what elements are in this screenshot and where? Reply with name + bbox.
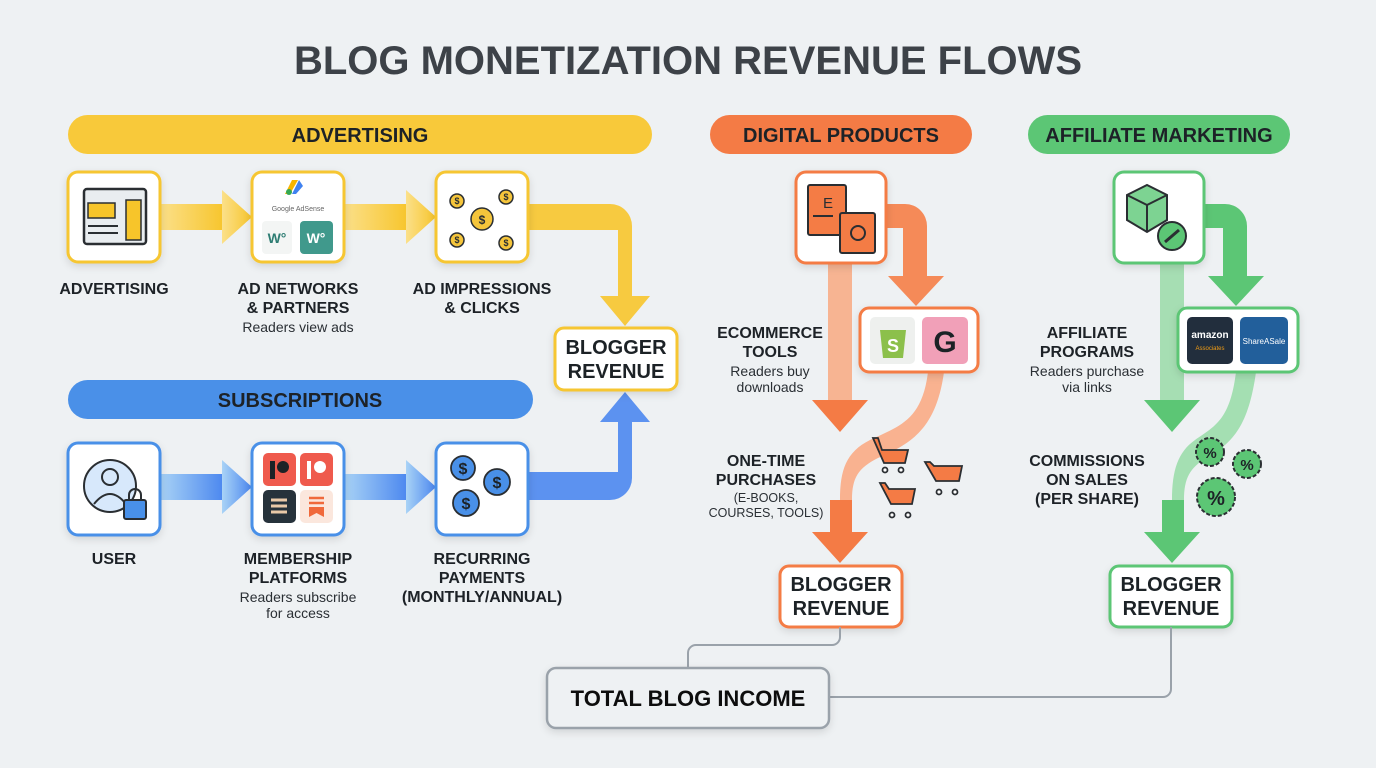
- label: ad networks: & PARTNERS: [247, 300, 350, 317]
- arrows: affiliate: [1144, 204, 1264, 563]
- label: ad impressions: & CLICKS: [444, 300, 520, 317]
- card: digital products: E: [823, 195, 833, 212]
- pill: digital products: [710, 115, 972, 154]
- icon: percent badges: %: [1207, 488, 1225, 510]
- card: advertising: [68, 172, 160, 262]
- box: blogger revenue (digital products): [780, 566, 902, 627]
- label: ad impressions: AD IMPRESSIONS: [413, 281, 552, 298]
- label: ad impressions: [413, 281, 552, 317]
- pill: subscriptions: [68, 380, 533, 419]
- pill: affiliate marketing: AFFILIATE MARKETING: [1045, 125, 1273, 147]
- card: recurring payments: $: [462, 496, 471, 513]
- card: ecommerce tools: S: [887, 336, 899, 356]
- card: ad networks: W°: [307, 230, 325, 246]
- label: ecommerce tools: TOOLS: [743, 344, 798, 361]
- label: commissions: ON SALES: [1046, 472, 1128, 489]
- label: membership platforms: [240, 551, 357, 621]
- card: affiliate programs: ShareASale: [1243, 337, 1286, 346]
- label: ad networks: [238, 281, 359, 335]
- label: affiliate programs: via links: [1062, 379, 1112, 395]
- card: ad impressions: $: [479, 213, 486, 227]
- label: recurring payments: PAYMENTS: [439, 570, 525, 587]
- label: recurring payments: RECURRING: [434, 551, 530, 568]
- connectors to total: [688, 627, 1171, 697]
- box: blogger revenue (digital products): REVENUE: [793, 598, 889, 620]
- label: one-time purchases: COURSES, TOOLS): [709, 506, 823, 520]
- card: digital products: [796, 172, 886, 263]
- box: total blog income: [547, 668, 829, 728]
- card: ecommerce tools: [860, 308, 978, 372]
- label: affiliate programs: Readers purchase: [1030, 363, 1144, 379]
- box: blogger revenue (affiliate): [1110, 566, 1232, 627]
- pill: affiliate marketing: [1028, 115, 1290, 154]
- label: commissions: (PER SHARE): [1035, 491, 1139, 508]
- label: affiliate programs: [1030, 325, 1144, 395]
- card: ecommerce tools: G: [933, 326, 957, 359]
- icon: percent badges: %: [1240, 457, 1254, 474]
- label: ecommerce tools: Readers buy: [730, 363, 810, 379]
- box: blogger revenue (affiliate): BLOGGER: [1120, 574, 1222, 596]
- card: affiliate programs: amazon: [1191, 330, 1229, 341]
- arrows: advertising flow: [160, 190, 650, 326]
- card: recurring payments: [436, 443, 528, 535]
- card: ad networks: [252, 172, 344, 262]
- label: ad networks: AD NETWORKS: [238, 281, 359, 298]
- icon: shopping carts: [873, 438, 962, 518]
- label: membership platforms: Readers subscribe: [240, 589, 357, 605]
- card: ad networks: W°: [268, 230, 286, 246]
- label: one-time purchases: PURCHASES: [716, 472, 817, 489]
- label: ecommerce tools: [717, 325, 823, 395]
- box: total blog income: TOTAL BLOG INCOME: [571, 686, 805, 711]
- label: user: USER: [92, 551, 137, 568]
- card: membership platforms: [252, 443, 344, 535]
- pill: advertising: [68, 115, 652, 154]
- label: advertising: ADVERTISING: [59, 281, 169, 298]
- box: blogger revenue (advertising/subscriptions): REVENUE: [568, 361, 664, 383]
- card: ad networks: Google AdSense: [272, 206, 324, 213]
- pill: subscriptions: SUBSCRIPTIONS: [218, 390, 382, 412]
- label: affiliate programs: AFFILIATE: [1047, 325, 1128, 342]
- card: recurring payments: $: [493, 475, 502, 492]
- box: blogger revenue (advertising/subscriptions): BLOGGER: [565, 337, 667, 359]
- label: commissions: COMMISSIONS: [1029, 453, 1145, 470]
- icon: percent badges: [1196, 438, 1261, 516]
- card: affiliate: [1114, 172, 1204, 263]
- card: ad impressions: $: [503, 238, 509, 248]
- icon: percent badges: %: [1203, 445, 1217, 462]
- arrows: subscriptions flow: [160, 392, 650, 514]
- pill: advertising: ADVERTISING: [292, 125, 428, 147]
- label: ecommerce tools: downloads: [737, 379, 803, 395]
- card: ad impressions: $: [454, 235, 460, 245]
- label: recurring payments: [402, 551, 562, 606]
- title: BLOG MONETIZATION REVENUE FLOWS: [294, 39, 1082, 83]
- label: membership platforms: for access: [266, 605, 330, 621]
- box: blogger revenue (affiliate): REVENUE: [1123, 598, 1219, 620]
- box: blogger revenue (advertising/subscriptions): [555, 328, 677, 390]
- label: one-time purchases: [709, 453, 823, 520]
- label: ad networks: Readers view ads: [242, 319, 354, 335]
- card: ad impressions: [436, 172, 528, 262]
- arrows: digital products: [812, 204, 944, 563]
- pill: digital products: DIGITAL PRODUCTS: [743, 125, 939, 147]
- label: recurring payments: (MONTHLY/ANNUAL): [402, 589, 562, 606]
- label: one-time purchases: ONE-TIME: [727, 453, 805, 470]
- label: one-time purchases: (E-BOOKS,: [734, 491, 798, 505]
- card: ad impressions: $: [503, 192, 509, 202]
- label: membership platforms: PLATFORMS: [249, 570, 348, 587]
- card: ad impressions: $: [454, 196, 460, 206]
- label: membership platforms: MEMBERSHIP: [244, 551, 353, 568]
- card: affiliate programs: Associates: [1195, 346, 1225, 352]
- label: commissions: [1029, 453, 1145, 508]
- card: user: [68, 443, 160, 535]
- card: affiliate programs: [1178, 308, 1298, 372]
- card: recurring payments: $: [459, 461, 468, 478]
- label: ecommerce tools: ECOMMERCE: [717, 325, 823, 342]
- label: affiliate programs: PROGRAMS: [1040, 344, 1134, 361]
- box: blogger revenue (digital products): BLOGGER: [790, 574, 892, 596]
